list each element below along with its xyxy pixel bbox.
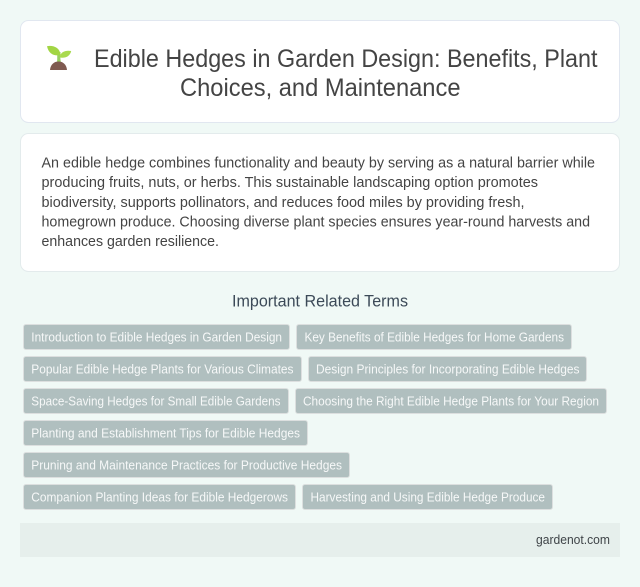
tag [24,388,288,414]
panel: title header [20,20,620,122]
tag: Key Benefits of Edible Hedges for Home Gardens [304,330,564,344]
tag: Introduction to Edible Hedges in Garden Design [31,330,282,344]
description text: biodiversity, supports pollinators, and reduces food miles by providing fresh, [42,195,524,211]
tag [302,484,552,510]
tag [24,452,350,478]
title: Edible Hedges in Garden Design: Benefits, Plant [94,45,598,73]
tag: Popular Edible Hedge Plants for Various Climates [31,362,294,376]
tag: Choosing the Right Edible Hedge Plants for Your Region [303,394,599,408]
tag: Planting and Establishment Tips for Edible Hedges [31,426,300,440]
tag [24,484,296,510]
title: Choices, and Maintenance [180,74,460,102]
tag [308,356,586,382]
description text: An edible hedge combines functionality and beauty by serving as a natural barrier while [42,156,595,172]
description text: enhances garden resilience. [42,234,219,250]
tag [296,388,606,414]
panel: description [20,134,620,272]
tag: Space-Saving Hedges for Small Edible Gardens [31,394,280,408]
description text [42,156,595,250]
term tags [24,324,606,510]
footer [20,523,620,557]
tag [24,324,290,350]
icon: seedling [47,46,71,70]
tag [24,420,308,446]
footer source: gardenot.com [536,532,610,547]
title [94,45,598,102]
tag [296,324,572,350]
description text: homegrown produce. Choosing diverse plant species ensures year-round harvests and [42,214,590,230]
tag: Companion Planting Ideas for Edible Hedgerows [31,490,288,504]
description text: producing fruits, nuts, or herbs. This sustainable landscaping option promotes [42,175,538,191]
tag: Design Principles for Incorporating Edible Hedges [316,362,580,376]
tag [24,356,302,382]
tag: Pruning and Maintenance Practices for Productive Hedges [31,458,342,472]
tag: Harvesting and Using Edible Hedge Produce [310,490,545,504]
heading: related terms: Important Related Terms [232,292,408,310]
